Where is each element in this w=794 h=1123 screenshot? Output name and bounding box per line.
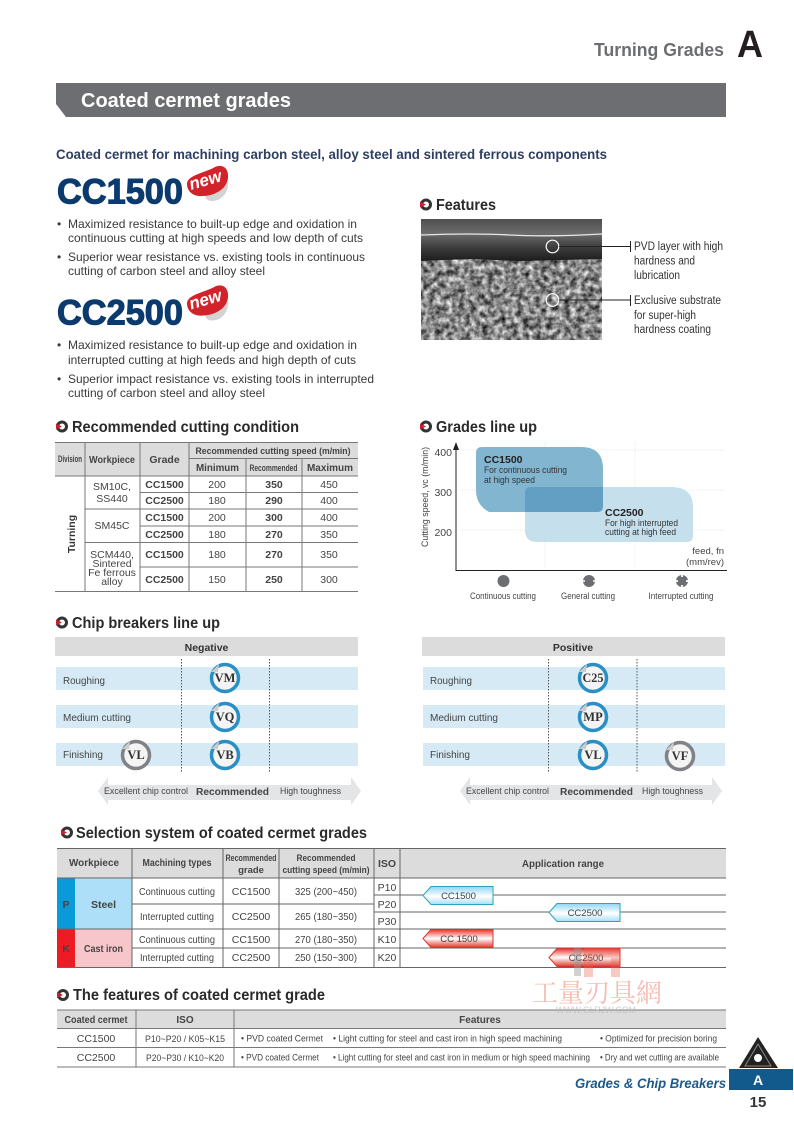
table: 270 xyxy=(265,549,283,561)
heading: Grades line up xyxy=(436,419,537,436)
table: CC1500 xyxy=(232,934,270,946)
page header: Turning Grades xyxy=(594,40,724,60)
table: SCM440, xyxy=(90,549,134,561)
panel: CC2500: Maximized resistance to built-up edge and oxidation in xyxy=(68,338,357,352)
label: CC1500: at high speed xyxy=(484,475,535,486)
table: Recommended xyxy=(296,853,356,864)
table: 150 xyxy=(208,574,226,586)
bubble: MP: MP xyxy=(583,710,603,724)
arrow: negative scale: Excellent chip control xyxy=(104,786,188,797)
axis arrow xyxy=(453,442,459,450)
panel: CC2500: interrupted cutting at high feeds and high depth of cuts xyxy=(68,353,356,367)
panel: selection system xyxy=(57,825,726,968)
table: Continuous cutting xyxy=(139,934,215,946)
page number: 15 xyxy=(750,1094,766,1111)
table: CC2500 xyxy=(145,495,184,507)
table: Steel xyxy=(91,899,116,911)
table: Minimum xyxy=(196,462,239,474)
panel: CC1500: Superior wear resistance vs. existing tools in continuous xyxy=(68,250,365,264)
icon: new badge xyxy=(187,166,228,201)
table: K xyxy=(62,943,70,955)
panel: CC1500: • xyxy=(57,250,61,264)
table: ISO xyxy=(176,1015,194,1026)
table: • Optimized for precision boring xyxy=(600,1034,717,1044)
icon: new badge xyxy=(187,285,228,320)
heading: The features of coated cermet grade xyxy=(73,987,325,1004)
panel: CC2500: cutting of carbon steel and alloy steel xyxy=(68,386,265,400)
section tab xyxy=(729,1069,793,1090)
table: Machining types xyxy=(142,857,212,869)
table: K20 xyxy=(378,952,396,964)
table: Sintered xyxy=(92,558,132,570)
icon: interrupted cutting: Interrupted cutting xyxy=(648,591,714,602)
icon: continuous cutting xyxy=(470,575,536,602)
table: 350 xyxy=(265,479,283,491)
table: 350 xyxy=(320,549,338,561)
range tag: CC1500 cast iron: CC 1500 xyxy=(440,934,478,945)
table: Coated cermet xyxy=(64,1015,128,1026)
table: cutting speed (m/min) xyxy=(282,865,370,876)
page header xyxy=(594,24,763,66)
table: alloy xyxy=(101,576,124,588)
y axis labels: 300 xyxy=(434,487,452,499)
chart xyxy=(420,442,727,602)
table: SS440 xyxy=(96,493,128,505)
table: SM10C, xyxy=(93,481,131,493)
panel: negative: Finishing xyxy=(63,749,103,761)
panel: positive: Roughing xyxy=(430,675,472,687)
table: • Light cutting for steel and cast iron in medium or high speed machining xyxy=(333,1052,590,1064)
label: CC1500 xyxy=(484,454,567,486)
bubble: C25: C25 xyxy=(582,671,604,685)
table: P10~P20 / K05~K15 xyxy=(145,1034,225,1045)
label: CC2500 xyxy=(605,507,678,538)
label: CC1500: CC1500 xyxy=(484,454,523,466)
icon: new badge: new xyxy=(187,166,226,194)
table: 400 xyxy=(320,495,338,507)
panel: negative: Medium cutting xyxy=(63,712,131,724)
table: 250 xyxy=(265,574,283,586)
micrograph photo xyxy=(421,219,602,340)
table: Continuous cutting xyxy=(139,886,215,898)
panel: CC2500: • xyxy=(57,338,61,352)
table: Turning xyxy=(66,515,78,553)
panel: CC2500: Superior impact resistance vs. existing tools in interrupted xyxy=(68,372,374,386)
panel: CC1500: continuous cutting at high speeds and low depth of cuts xyxy=(68,231,363,245)
overlap xyxy=(525,487,603,512)
table: 325 (200~450) xyxy=(295,886,357,898)
table: Maximum xyxy=(307,462,353,474)
table: 350 xyxy=(320,529,338,541)
table: CC2500 xyxy=(145,529,184,541)
table: 200 xyxy=(208,512,226,524)
callout: substrate xyxy=(559,295,721,336)
table: K10 xyxy=(378,934,396,946)
panel: CC2500: • xyxy=(57,372,61,386)
table: CC2500 xyxy=(77,1052,115,1064)
panel: CC1500: Maximized resistance to built-up edge and oxidation in xyxy=(68,217,357,231)
bubble: VQ xyxy=(211,703,238,730)
arrow: positive scale xyxy=(460,777,722,805)
heading: Chip breakers line up xyxy=(72,615,220,632)
watermark xyxy=(532,948,662,1015)
table: 300 xyxy=(265,512,283,524)
range tag: CC1500 steel xyxy=(423,886,493,904)
table: 180 xyxy=(208,495,226,507)
panel: CC1500 xyxy=(57,166,365,278)
table: Cast iron xyxy=(84,943,123,955)
range tag: CC2500 steel xyxy=(549,904,620,922)
panel: CC1500: cutting of carbon steel and alloy steel xyxy=(68,264,265,278)
table: P20~P30 / K10~K20 xyxy=(146,1053,224,1064)
title banner xyxy=(56,83,726,117)
table: Workpiece xyxy=(89,454,135,466)
label: CC2500: CC2500 xyxy=(605,507,644,519)
table: Interrupted cutting xyxy=(140,911,214,923)
icon: continuous cutting: Continuous cutting xyxy=(470,591,536,602)
bubble: C25 xyxy=(579,664,606,692)
table: CC2500 xyxy=(145,574,184,586)
label: CC1500: For continuous cutting xyxy=(484,465,567,476)
range tag: CC2500 steel: CC2500 xyxy=(568,908,602,919)
table: 300 xyxy=(320,574,338,586)
table: Fe ferrous xyxy=(88,567,136,579)
bubble: VL xyxy=(122,741,150,768)
bubble: VL xyxy=(579,741,606,768)
panel: negative: Negative xyxy=(185,642,229,654)
arrow: negative scale xyxy=(98,777,361,805)
icon: insert triangle logo xyxy=(739,1037,778,1068)
table: P xyxy=(62,899,70,911)
table: • Light cutting for steel and cast iron in high speed machining xyxy=(333,1034,562,1044)
heading: Recommended cutting condition xyxy=(72,419,299,436)
table: P30 xyxy=(378,916,396,928)
table: CC1500 xyxy=(145,549,184,561)
panel: features of coated cermet grade xyxy=(57,987,726,1067)
panel: negative: Roughing xyxy=(63,675,105,687)
callout: PVD layer: PVD layer with high xyxy=(634,241,723,253)
range tag: CC2500 cast iron: CC2500 xyxy=(569,953,603,964)
table: CC2500 xyxy=(232,952,270,964)
page header: A xyxy=(737,24,763,66)
table: CC2500 xyxy=(232,911,270,923)
panel: negative xyxy=(55,637,361,805)
grade area: CC2500 xyxy=(525,487,693,542)
callout: substrate: Exclusive substrate xyxy=(634,295,721,307)
section tab: A xyxy=(753,1072,763,1088)
heading: Selection system of coated cermet grades xyxy=(76,825,367,842)
panel: positive xyxy=(422,637,725,805)
callout: PVD layer xyxy=(559,241,723,282)
table: • Dry and wet cutting are available xyxy=(600,1052,719,1064)
panel: CC2500: CC2500 xyxy=(57,294,183,332)
table: Recommended xyxy=(250,463,298,474)
icon: new badge: new xyxy=(187,285,226,313)
table: Features xyxy=(459,1015,501,1026)
table: 180 xyxy=(208,529,226,541)
arrow: positive scale: Recommended xyxy=(560,786,633,798)
bubble: MP xyxy=(579,703,606,730)
table: • PVD coated Cermet xyxy=(241,1052,319,1064)
callout: substrate: hardness coating xyxy=(634,324,711,336)
table: Application range xyxy=(522,858,604,870)
table: Interrupted cutting xyxy=(140,952,214,964)
table: CC1500 xyxy=(77,1033,115,1045)
bubble: VF: VF xyxy=(672,749,689,763)
table: Recommended cutting speed (m/min) xyxy=(196,446,350,457)
table: grade xyxy=(238,865,264,876)
icon: interrupted cutting xyxy=(648,574,714,602)
table: 450 xyxy=(320,479,338,491)
title banner: Coated cermet grades xyxy=(81,90,291,112)
callout: substrate: for super-high xyxy=(634,310,696,322)
x axis label: feed, fn xyxy=(692,546,724,557)
x axis label: (mm/rev) xyxy=(686,557,724,568)
bubble: VQ: VQ xyxy=(216,710,235,724)
range tag: CC2500 cast iron xyxy=(549,948,620,966)
bubble: VM: VM xyxy=(215,671,236,685)
table: P20 xyxy=(378,899,396,911)
y axis labels: Cutting speed, vc (m/min) xyxy=(420,447,431,547)
label: CC2500: cutting at high feed xyxy=(605,527,676,538)
icon: general cutting xyxy=(561,575,615,602)
table: 200 xyxy=(208,479,226,491)
panel: positive: Positive xyxy=(553,642,593,654)
table: 270 xyxy=(265,529,283,541)
panel: chip breakers line up xyxy=(55,615,725,805)
range tag: CC1500 steel: CC1500 xyxy=(441,891,476,902)
bubble: VB xyxy=(211,741,238,768)
x axis label xyxy=(686,546,724,568)
range tag: CC1500 cast iron xyxy=(423,930,493,948)
bubble: VB: VB xyxy=(216,748,234,762)
panel: features xyxy=(420,197,723,340)
bubble: VF xyxy=(666,742,694,770)
table: Grade xyxy=(149,454,180,466)
label: CC2500: For high interrupted xyxy=(605,518,678,529)
bubble: VL: VL xyxy=(127,748,145,762)
table: SM45C xyxy=(94,520,130,532)
grade area: CC1500 xyxy=(476,447,603,512)
arrow: positive scale: High toughness xyxy=(642,786,703,797)
table xyxy=(57,848,726,968)
arrow: positive scale: Excellent chip control xyxy=(466,786,549,797)
table xyxy=(57,1010,726,1067)
panel: CC1500: CC1500 xyxy=(57,172,183,212)
table: 270 (180~350) xyxy=(295,934,357,946)
callout: PVD layer: lubrication xyxy=(634,270,680,282)
table: Recommended xyxy=(226,853,277,864)
bubble: VL: VL xyxy=(584,748,602,762)
callout: PVD layer: hardness and xyxy=(634,256,695,268)
table: 290 xyxy=(265,495,283,507)
icon: general cutting: General cutting xyxy=(561,591,615,602)
panel: CC2500 xyxy=(57,285,374,400)
table: CC1500 xyxy=(232,886,270,898)
y axis labels: 200 xyxy=(434,527,452,539)
table: 250 (150~300) xyxy=(295,952,357,964)
arrow: negative scale: High toughness xyxy=(280,786,341,797)
table: CC1500 xyxy=(145,479,184,491)
table: Workpiece xyxy=(69,857,119,869)
table: • PVD coated Cermet xyxy=(241,1034,323,1044)
watermark: 工量刃具網 xyxy=(532,979,662,1008)
subtitle: Coated cermet for machining carbon steel, alloy steel and sintered ferrous components xyxy=(56,146,607,162)
table: P10 xyxy=(378,882,396,894)
panel: positive: Finishing xyxy=(430,749,470,761)
table: 265 (180~350) xyxy=(295,911,357,923)
table: Division xyxy=(58,454,82,464)
table: ISO xyxy=(378,858,396,870)
table: 400 xyxy=(320,512,338,524)
table: CC1500 xyxy=(145,512,184,524)
y axis labels: 400 xyxy=(434,447,452,459)
table: 180 xyxy=(208,549,226,561)
table xyxy=(55,442,358,592)
panel: grades line up xyxy=(420,419,727,602)
watermark: WWW.GLRJW.COM xyxy=(556,1005,636,1015)
heading: features: Features xyxy=(436,197,496,214)
axes xyxy=(456,448,727,570)
panel: CC1500: • xyxy=(57,217,61,231)
panel: recommended cutting condition xyxy=(55,419,358,592)
footer label: Grades & Chip Breakers xyxy=(575,1075,726,1091)
bubble: VM xyxy=(211,664,238,692)
panel: positive: Medium cutting xyxy=(430,712,498,724)
arrow: negative scale: Recommended xyxy=(196,786,269,798)
y axis labels xyxy=(420,447,452,547)
